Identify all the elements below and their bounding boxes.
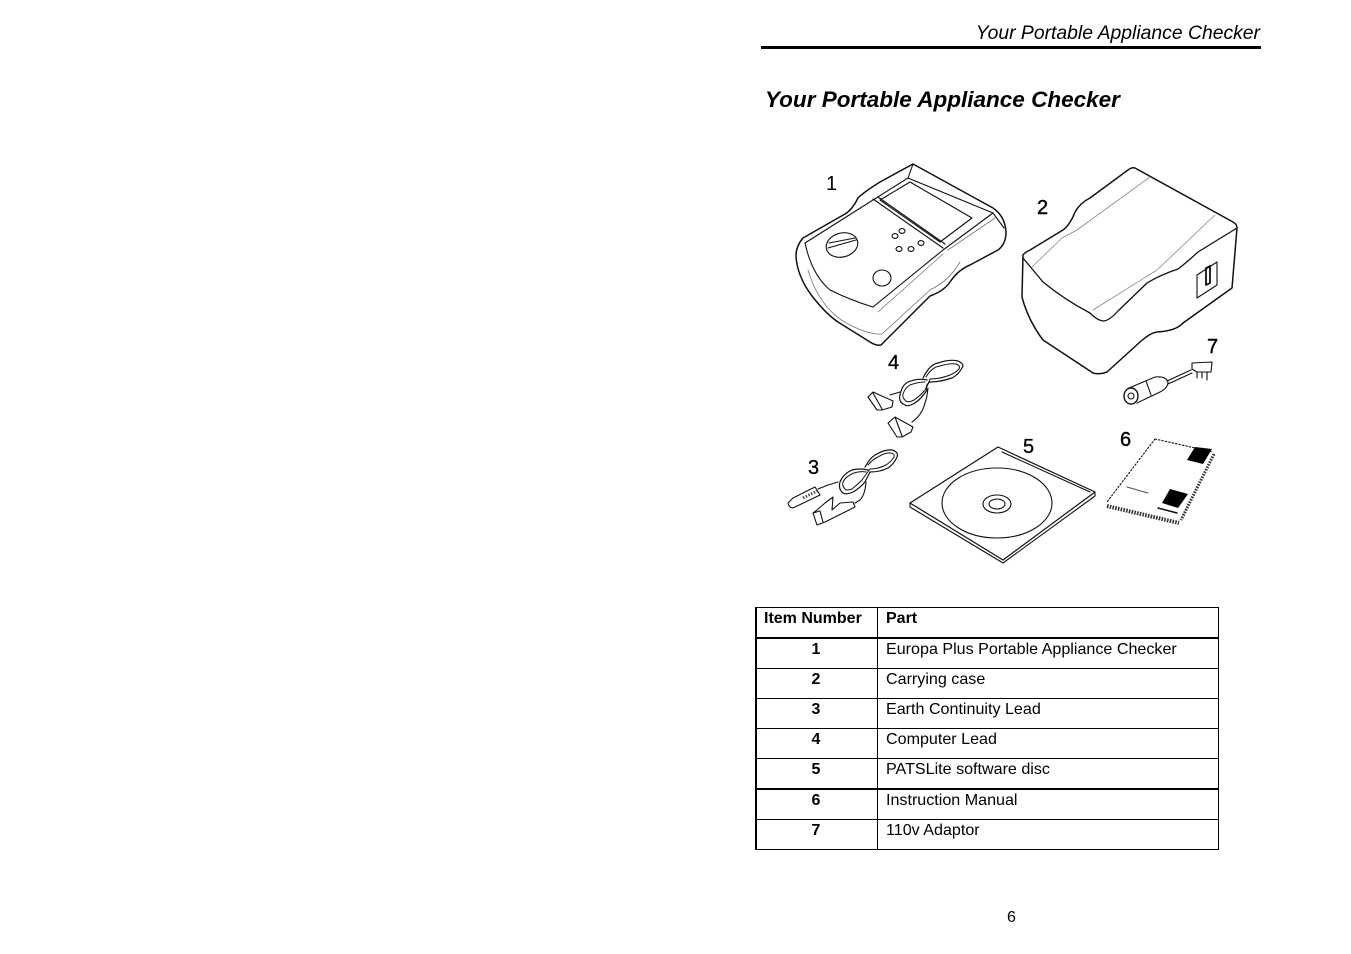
item 1: appliance checker [796, 164, 1006, 345]
item number labels: 7 [1207, 336, 1218, 358]
row 4 part: Computer Lead [886, 730, 997, 748]
table borders [755, 607, 1219, 850]
row 5 part: PATSLite software disc [886, 760, 1050, 778]
row 1 part: Europa Plus Portable Appliance Checker [886, 640, 1177, 658]
item 2: carrying case [1022, 168, 1237, 374]
table header: item number: Item Number [764, 610, 862, 627]
row 6 number: 6 [812, 792, 820, 809]
item 4: computer lead [868, 360, 963, 437]
row 6 part: Instruction Manual [886, 791, 1018, 809]
table header: part: Part [886, 610, 917, 627]
item number labels: 3 [808, 457, 819, 479]
row 3 number: 3 [812, 701, 820, 718]
item number labels: 1 [826, 173, 837, 195]
row 5 number: 5 [812, 761, 820, 778]
row 1 number: 1 [812, 641, 820, 658]
row 3 part: Earth Continuity Lead [886, 700, 1041, 718]
item number labels [808, 173, 1218, 479]
row 2 part: Carrying case [886, 670, 985, 688]
running header: Your Portable Appliance Checker [976, 22, 1260, 44]
item number labels: 5 [1023, 436, 1034, 458]
row 7 part: 110v Adaptor [886, 821, 980, 839]
header rule [761, 46, 1261, 49]
row 2 number: 2 [812, 671, 820, 688]
row 4 number: 4 [812, 731, 820, 748]
item number labels: 2 [1037, 197, 1048, 219]
page title: Your Portable Appliance Checker [765, 87, 1120, 112]
item number labels: 6 [1120, 429, 1131, 451]
item 7: 110v adaptor [1124, 362, 1212, 404]
page number: 6 [1007, 909, 1016, 926]
item number labels: 4 [888, 352, 899, 374]
item 3: earth continuity lead [788, 450, 897, 525]
row 7 number: 7 [812, 822, 820, 839]
item 5: software disc [910, 447, 1095, 563]
item 6: instruction manual [1107, 439, 1214, 523]
